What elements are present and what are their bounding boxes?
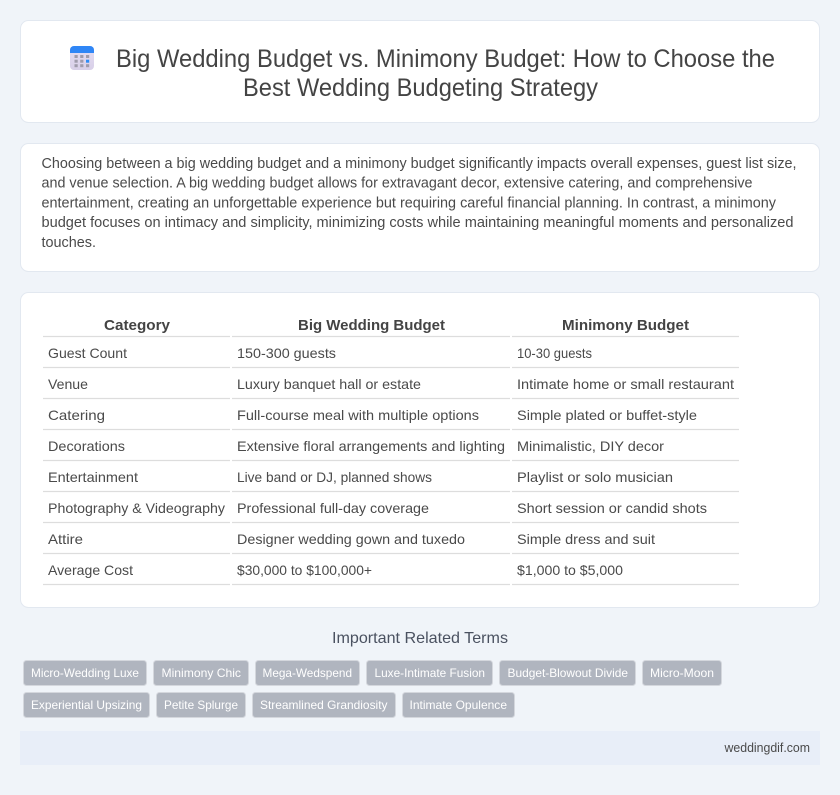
row: guest count: 150-300 guests — [237, 345, 336, 361]
title: Best Wedding Budgeting Strategy — [243, 74, 598, 102]
row: venue: Luxury banquet hall or estate — [237, 376, 421, 392]
footer: weddingdif.com — [724, 740, 810, 755]
tags: related terms: Mega-Wedspend — [262, 666, 352, 680]
table header — [104, 317, 689, 334]
row: average cost: Average Cost — [48, 562, 133, 578]
row: attire: Simple dress and suit — [517, 531, 655, 547]
row: photography: Professional full-day coverage — [237, 500, 429, 516]
row: venue — [48, 376, 734, 392]
row: catering: Full-course meal with multiple options — [237, 407, 479, 423]
row: guest count: Guest Count — [48, 345, 127, 361]
tags: related terms: Intimate Opulence — [410, 698, 507, 712]
row: entertainment — [48, 469, 673, 485]
row: decorations: Minimalistic, DIY decor — [517, 438, 664, 454]
tags: related terms: Petite Splurge — [164, 698, 238, 712]
tags: related terms: Micro-Moon — [650, 666, 714, 680]
text block: description paragraph: Choosing between a big wedding budget and a minimony budget significantly impacts overall expenses, guest list size, — [42, 156, 796, 172]
row: decorations: Extensive floral arrangements and lighting — [237, 438, 505, 454]
row: attire: Designer wedding gown and tuxedo — [237, 531, 465, 547]
row: catering: Simple plated or buffet-style — [517, 407, 697, 423]
row: decorations — [48, 438, 664, 454]
icon: calendar — [70, 46, 94, 70]
tags: related terms: Streamlined Grandiosity — [260, 698, 388, 712]
panel: comparison table — [20, 292, 820, 608]
tags: related terms — [24, 660, 722, 718]
row: photography — [48, 500, 707, 516]
table header: Minimony Budget — [562, 317, 689, 334]
text block: description paragraph: touches. — [42, 235, 96, 251]
row: average cost: $30,000 to $100,000+ — [237, 562, 372, 578]
tags: related terms: Micro-Wedding Luxe — [31, 666, 139, 680]
tags: related terms: Budget-Blowout Divide — [508, 666, 628, 680]
tags: related terms: Experiential Upsizing — [31, 698, 142, 712]
text block: description paragraph: entertainment, creating an unforgettable experience but requiring careful financial planning. In contrast, a minimony — [42, 196, 777, 212]
row: guest count: 10-30 guests — [517, 345, 592, 361]
row: average cost — [48, 562, 623, 578]
row: catering — [48, 407, 697, 423]
row: photography: Short session or candid shots — [517, 500, 707, 516]
row: entertainment: Entertainment — [48, 469, 138, 485]
row: attire — [48, 531, 655, 547]
panel: description — [20, 144, 820, 272]
text block: description paragraph: and venue selection. A big wedding budget allows for extravagant decor, extensive catering, and comprehensive — [42, 176, 752, 192]
tags: related terms: Minimony Chic — [162, 666, 241, 680]
row: venue: Intimate home or small restaurant — [517, 376, 734, 392]
title — [116, 45, 775, 102]
panel: title header — [20, 20, 820, 122]
row: average cost: $1,000 to $5,000 — [517, 562, 623, 578]
row: entertainment: Live band or DJ, planned shows — [237, 469, 432, 485]
row: entertainment: Playlist or solo musician — [517, 469, 673, 485]
text block: description paragraph — [42, 156, 796, 251]
tags: related terms: Luxe-Intimate Fusion — [374, 666, 485, 680]
row: attire: Attire — [48, 531, 83, 547]
row: catering: Catering — [48, 407, 105, 423]
row: guest count — [48, 345, 592, 361]
text block: description paragraph: budget focuses on intimacy and simplicity, minimizing costs while maintaining meaningful moments and personalized — [42, 215, 794, 231]
row: venue: Venue — [48, 376, 88, 392]
table header: Category — [104, 317, 171, 334]
footer — [20, 731, 820, 765]
title: Big Wedding Budget vs. Minimony Budget: How to Choose the — [116, 45, 775, 73]
heading: important related terms: Important Related Terms — [332, 630, 508, 647]
row: photography: Photography & Videography — [48, 500, 225, 516]
row: decorations: Decorations — [48, 438, 125, 454]
table header: Big Wedding Budget — [298, 317, 445, 334]
